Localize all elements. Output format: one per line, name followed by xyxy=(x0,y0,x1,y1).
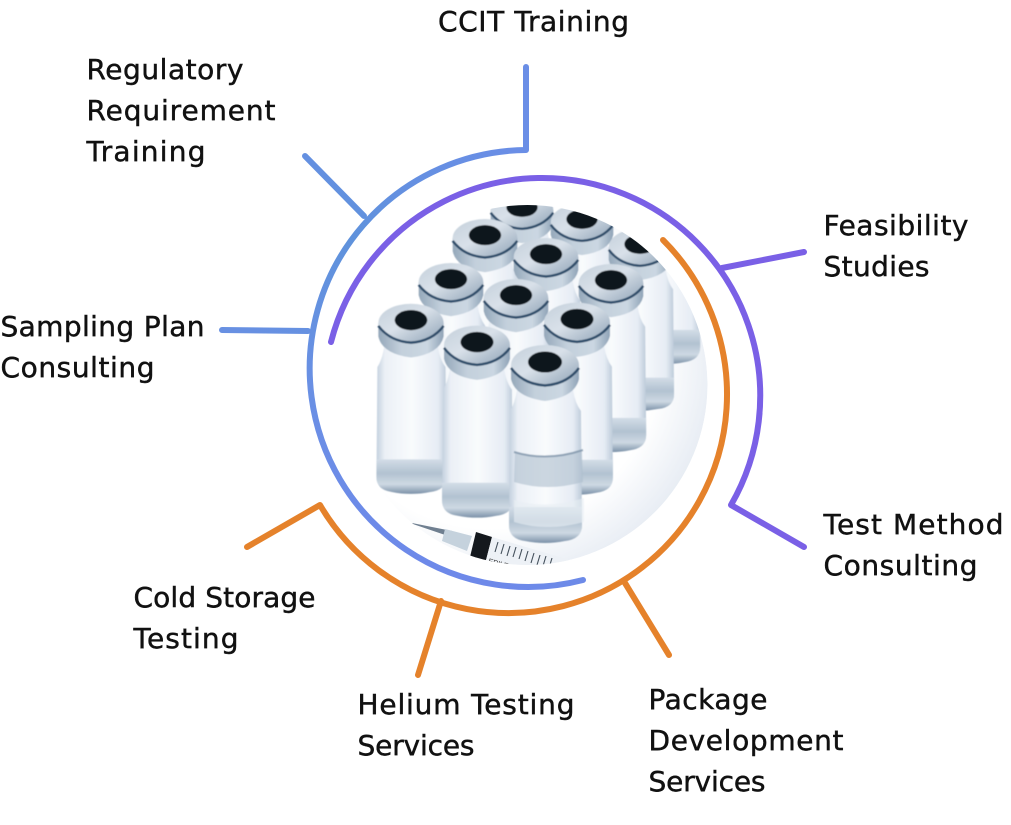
label: Package Development Services xyxy=(648,683,844,798)
label: Sampling Plan Consulting: Sampling Plan xyxy=(0,310,204,343)
label: Cold Storage Testing: Testing xyxy=(132,622,238,655)
label: Cold Storage Testing xyxy=(132,581,316,655)
label: Test Method Consulting xyxy=(822,508,1004,582)
label: Sampling Plan Consulting: Consulting xyxy=(0,351,154,384)
label: Test Method Consulting: Consulting xyxy=(824,549,978,582)
blue arc with connectors xyxy=(222,67,583,587)
purple arc with connectors xyxy=(331,178,804,547)
label: Regulatory Requirement Training: Regulatory xyxy=(86,53,244,86)
label: Package Development Services: Package xyxy=(648,683,768,716)
label: Package Development Services: Development xyxy=(648,724,844,757)
label: Helium Testing Services: Services xyxy=(358,729,474,762)
label: Helium Testing Services xyxy=(358,688,574,762)
photo: glass vials and syringe xyxy=(376,205,708,565)
label: Package Development Services: Services xyxy=(648,765,766,798)
label: CCIT Training: CCIT Training xyxy=(438,5,629,38)
label: Sampling Plan Consulting xyxy=(0,310,204,384)
label: Test Method Consulting: Test Method xyxy=(822,508,1004,541)
label: Regulatory Requirement Training: Training xyxy=(86,135,206,168)
label: Regulatory Requirement Training xyxy=(86,53,276,168)
label: Feasibility Studies xyxy=(824,209,968,283)
label: Helium Testing Services: Helium Testing xyxy=(358,688,574,721)
label: Feasibility Studies: Studies xyxy=(824,250,930,283)
orange arc with connectors xyxy=(247,240,727,675)
label: Feasibility Studies: Feasibility xyxy=(824,209,968,242)
photo: glass vials and syringe: ERILE SYR xyxy=(487,558,525,574)
label: Cold Storage Testing: Cold Storage xyxy=(134,581,316,614)
label: Regulatory Requirement Training: Requirement xyxy=(86,94,276,127)
